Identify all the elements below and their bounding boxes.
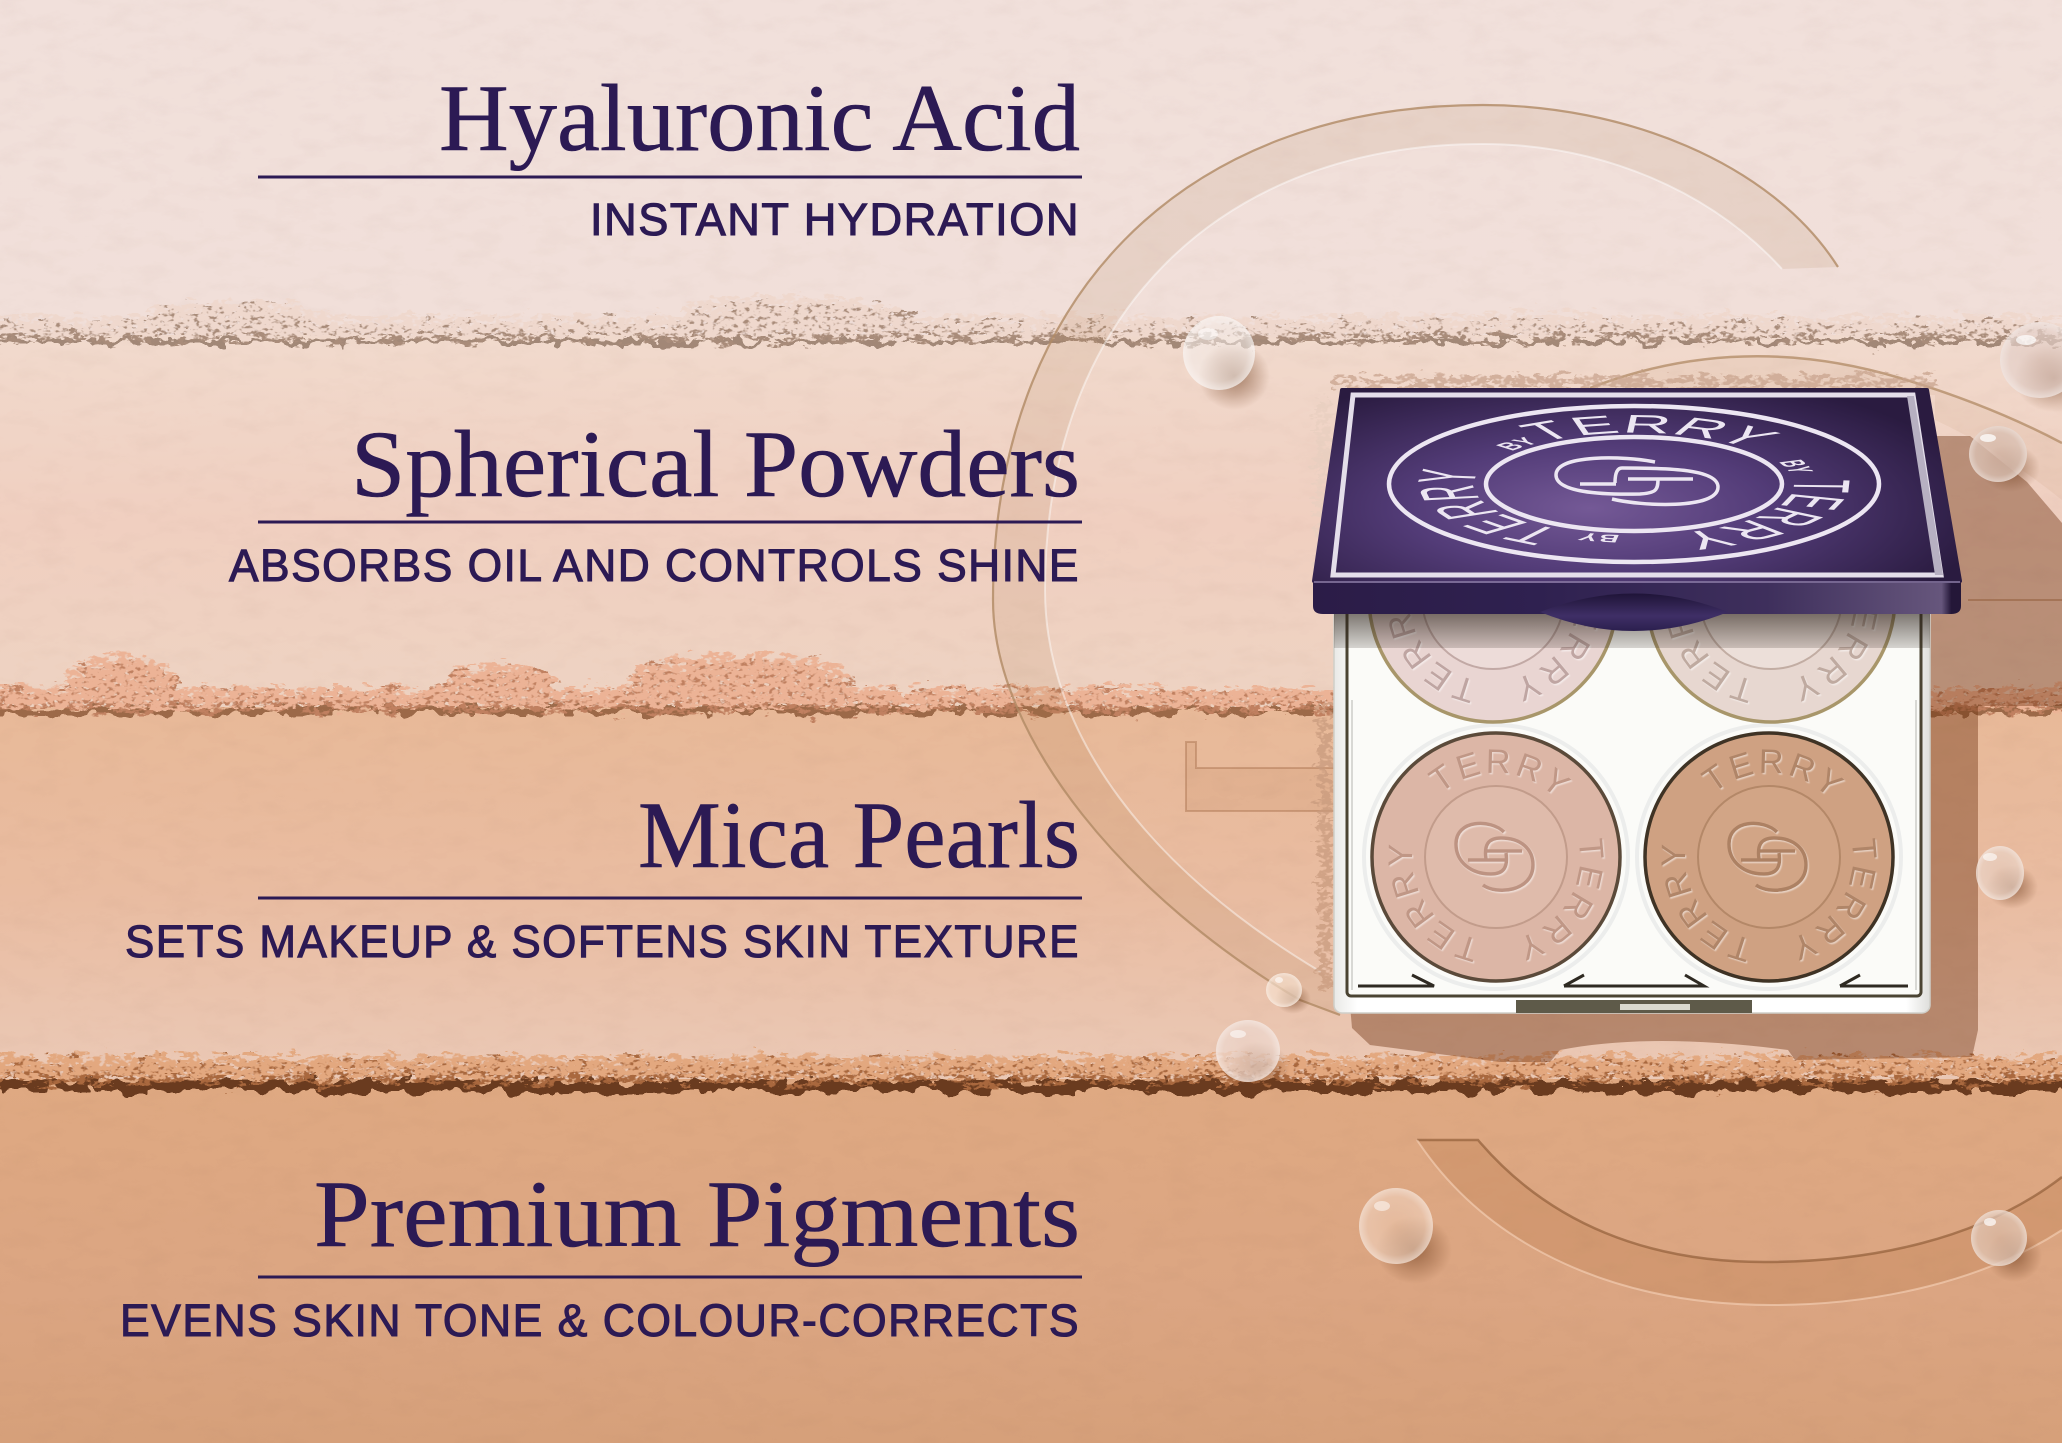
lid seal: TERRY — [1418, 468, 1550, 546]
ingredient: Spherical Powders: ABSORBS OIL AND CONTROLS SHINE — [229, 540, 1080, 591]
ingredient: Hyaluronic Acid: INSTANT HYDRATION — [590, 194, 1080, 245]
ingredient: Hyaluronic Acid — [258, 65, 1082, 245]
lid shadow on tray — [1334, 612, 1930, 648]
palette compact — [1312, 388, 1962, 1014]
lid seal: BY — [1578, 533, 1619, 542]
powder pan: bottom left: TERRY — [1526, 838, 1606, 962]
powder pan: bottom left: TERRY — [1428, 749, 1572, 794]
powder pan: top left — [1368, 614, 1614, 724]
lid seal: BY — [1779, 460, 1814, 472]
powder pan: top right: TERRY — [1668, 626, 1750, 704]
powder pan: bottom right: TERRY — [1700, 750, 1846, 794]
droplet 6 — [1216, 1020, 1290, 1094]
embossed T shape — [1186, 742, 1335, 811]
powder pan: bottom right — [1643, 731, 1895, 983]
powder dust around palette — [1316, 376, 1940, 990]
droplet 1 — [1183, 316, 1270, 410]
embossed ring: lower arc — [1417, 1140, 2062, 1305]
powder pan: bottom right: TERRY — [1662, 844, 1748, 964]
droplet 5 — [1266, 973, 1311, 1014]
powder pan: top left: TERRY — [1389, 614, 1472, 704]
embossed ring: upper arc — [993, 105, 1838, 1015]
powder ridge 2 — [0, 654, 2062, 714]
ingredient: Mica Pearls — [125, 782, 1082, 967]
palette cast shadow — [1350, 436, 2062, 1062]
powder ridge 3 — [0, 1056, 2062, 1092]
droplet 4 — [1976, 846, 2038, 909]
purple lid — [1312, 388, 1962, 631]
white tray — [1334, 600, 1930, 1013]
droplet 7 — [1359, 1188, 1452, 1284]
lid seal: TERRY — [1694, 480, 1850, 550]
lid seal — [1386, 404, 1882, 564]
powder pan: bottom right: TERRY — [1798, 838, 1878, 962]
powder pan: top left: TERRY — [1522, 623, 1598, 703]
powder pan: bottom left — [1370, 731, 1622, 983]
powder pan: top right — [1650, 614, 1896, 724]
ingredient: Premium Pigments: EVENS SKIN TONE & COLOUR-CORRECTS — [120, 1295, 1080, 1346]
embossed arc behind palette — [1590, 356, 2062, 500]
lid seal: TERRY — [1518, 415, 1780, 444]
ingredient: Premium Pigments — [120, 1161, 1082, 1346]
ingredient: Spherical Powders — [229, 411, 1082, 591]
droplet 2 — [2000, 322, 2062, 412]
ingredient: Premium Pigments: Premium Pigments — [314, 1161, 1080, 1267]
droplet 3 — [1969, 426, 2040, 492]
ingredient: Spherical Powders: Spherical Powders — [351, 411, 1080, 517]
ingredient: Mica Pearls: Mica Pearls — [638, 782, 1080, 888]
water droplets — [1183, 316, 2062, 1284]
lid seal: BY — [1496, 436, 1534, 450]
powder ridge 1 — [0, 296, 2062, 343]
ingredient: Hyaluronic Acid: Hyaluronic Acid — [439, 65, 1080, 171]
droplet 8 — [1971, 1210, 2042, 1282]
powder pan: top right: TERRY — [1800, 614, 1878, 703]
powder pan: bottom left: TERRY — [1388, 844, 1475, 964]
ingredient: Mica Pearls: SETS MAKEUP & SOFTENS SKIN TEXTURE — [125, 916, 1080, 967]
lid logo — [1556, 458, 1718, 504]
